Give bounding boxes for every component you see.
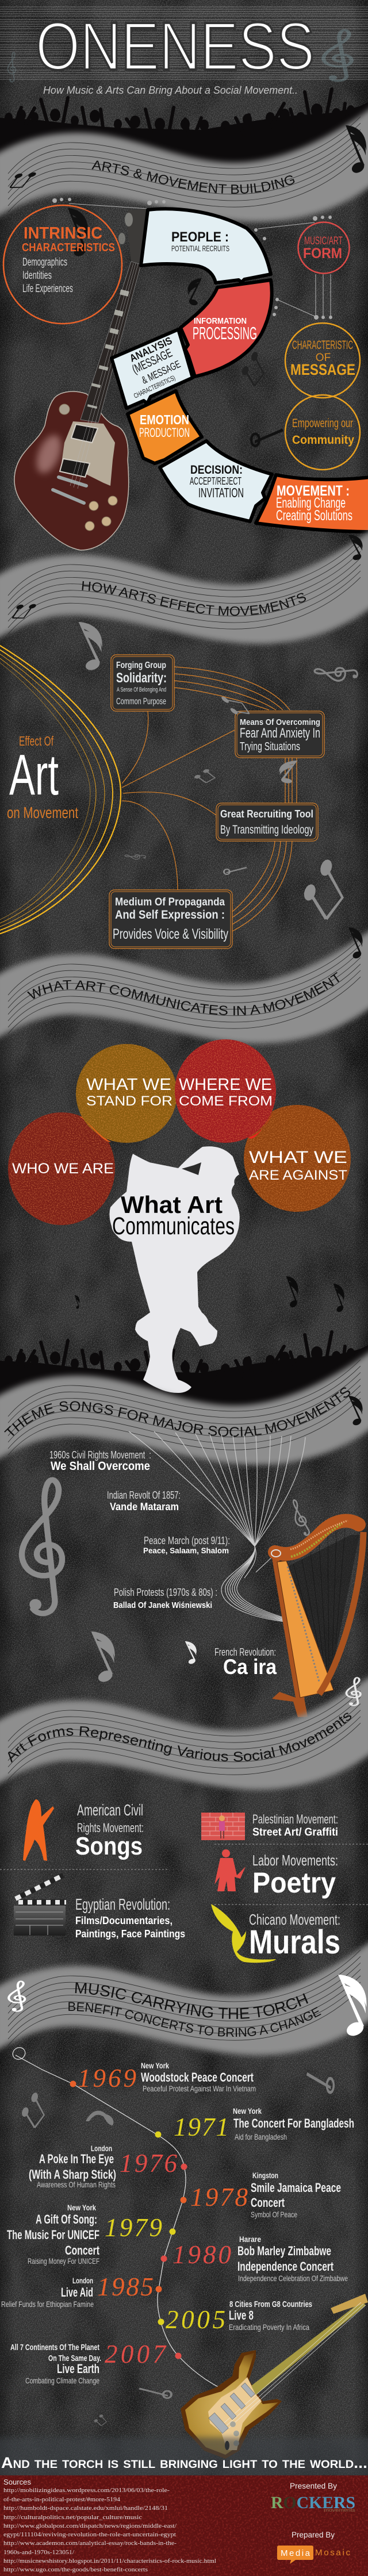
event: poke in the eye 1976 (29, 2144, 116, 2189)
event: live aid 1985: Live Aid (61, 2285, 93, 2299)
panel: footer (0, 2475, 368, 2576)
box: medium of propaganda (109, 890, 232, 949)
banner: what art communicates (0, 927, 368, 1047)
credit: prepared by: Prepared By (292, 2530, 335, 2539)
icon: note right (348, 535, 363, 561)
event: bangladesh 1971: Aid for Bangladesh (235, 2132, 287, 2141)
step: analysis: CHARACTERISTICS) (132, 374, 177, 400)
step: information processing: PROCESSING (193, 323, 257, 343)
sources list: egypt/111104/reviving-revolution-the-role-art-uncertain-egypt (3, 2531, 176, 2538)
guitar strap lines (52, 198, 332, 320)
box: great recruiting tool: Great Recruiting Tool (220, 808, 313, 820)
event: live 8 2005 (229, 2299, 312, 2332)
harp strings stream (129, 1431, 310, 1624)
step: information processing: INFORMATION (194, 316, 247, 326)
illustration: stratocaster guitar (181, 2294, 368, 2459)
sources list: http://www.academon.com/analytical-essay/rock-bands-in-the- (3, 2540, 177, 2547)
box: forging group solidarity (111, 655, 174, 711)
icon: white clef (9, 1981, 25, 2011)
label: what we stand for: WHAT WE (86, 1076, 171, 1094)
text: french revolution theme song: Ca ira (223, 1655, 277, 1679)
event: bangladesh 1971: New York (233, 2106, 262, 2116)
logo: rockers: ROCKERS (271, 2493, 355, 2512)
icon: red poet (214, 1849, 246, 1891)
year labels (78, 2064, 248, 2368)
text: indian revolt theme song (107, 1489, 181, 1512)
step: emotion production: PRODUCTION (139, 425, 190, 440)
step: information processing (181, 280, 272, 377)
circle: intrinsic characteristics: Demographics (22, 256, 67, 268)
label: what we are against: WHAT WE (249, 1148, 347, 1167)
icon: note left (8, 597, 39, 624)
step: decision: INVITATION (198, 485, 244, 500)
icon: black note near community (251, 428, 283, 446)
step: people: POTENTIAL RECRUITS (171, 244, 229, 253)
event: poke in the eye 1976: (With A Sharp Stick) (29, 2167, 116, 2182)
label: who we are: WHO WE ARE (12, 1161, 114, 1177)
year labels: 2005 (166, 2305, 225, 2334)
process road (112, 209, 368, 532)
box: forging group solidarity: Solidarity: (116, 670, 167, 686)
label: where we come from: WHERE WE (179, 1076, 272, 1094)
sources list: http://www.globalpost.com/dispatch/news/regions/middle-east/ (3, 2523, 177, 2529)
event: bangladesh 1971 (233, 2106, 354, 2141)
icon: note left (6, 165, 39, 193)
banner: how arts effect movements (0, 528, 368, 648)
divider lines (0, 1844, 368, 1905)
text: effect of art on movement: Effect Of (19, 734, 53, 748)
text: indian revolt theme song: Indian Revolt Of 1857: (107, 1489, 181, 1501)
illustration: harp (270, 1521, 363, 1717)
icons: floating notes (91, 1499, 312, 1684)
year labels: 1969 (78, 2064, 136, 2093)
silhouette notch (182, 1162, 201, 1175)
step: decision: DECISION: (190, 463, 243, 477)
text: peace march theme song: Peace, Salaam, Shalom (143, 1546, 229, 1555)
step: analysis (112, 329, 193, 408)
year labels: 1971 (174, 2113, 229, 2141)
circle: characteristic of message: OF (316, 352, 331, 364)
event: smile jamaica 1978 (251, 2171, 341, 2219)
text: effect of art on movement: Art (9, 743, 59, 807)
circle: music/art form: FORM (303, 245, 342, 262)
sources list: http://mobilizingideas.wordpress.com/2013/06/03/the-role- (3, 2487, 170, 2494)
icon: white note (338, 1975, 366, 2038)
icon: faint treble clef left (7, 52, 16, 82)
step: people (141, 209, 271, 283)
box: forging group solidarity: Common Purpose (116, 697, 166, 707)
text: american civil rights songs: Rights Movement: (77, 1821, 144, 1835)
panel: effect of art on movement (0, 622, 357, 949)
box: forging group solidarity: A Sense Of Belonging And (117, 686, 166, 693)
box: medium of propaganda: Provides Voice & Visibility (113, 926, 228, 942)
timeline line (16, 2055, 246, 2399)
sources list: http://humboldt-dspace.calstate.edu/xmlui/handle/2148/31 (3, 2505, 168, 2512)
banner: theme songs (0, 1349, 368, 1469)
icon: brick wall with girl (201, 1813, 245, 1840)
step: movement (256, 475, 368, 532)
circle: intrinsic characteristics (3, 205, 122, 324)
icon: small note (187, 278, 202, 306)
illustration: les paul guitar (14, 209, 147, 550)
subtitle: How Music & Arts Can Bring About a Social Movement.. (43, 85, 298, 96)
icon: white clef (346, 1677, 361, 1706)
box: forging group solidarity: Forging Group (116, 661, 166, 670)
logo: media mosaic: Media (281, 2548, 310, 2558)
event: live earth 2007: On The Same Day. (48, 2354, 101, 2363)
step: emotion production (128, 391, 202, 463)
circle: intrinsic characteristics: CHARACTERISTICS (22, 241, 115, 254)
text: indian revolt theme song: Vande Mataram (110, 1501, 179, 1512)
event: gift of song 1979: New York (67, 2203, 96, 2212)
event: gift of song 1979: Raising Money For UNICEF (28, 2256, 99, 2266)
text: american civil rights songs: Songs (75, 1832, 143, 1860)
icons: grey floating notes (79, 622, 357, 920)
icon: note behind intrinsic circle (68, 208, 88, 258)
step: analysis: & MESSAGE (140, 358, 182, 386)
event: live earth 2007: Live Earth (57, 2362, 99, 2376)
sources list (3, 2478, 216, 2573)
icon: yellow quill (211, 1904, 276, 1963)
event: poke in the eye 1976: Awareness Of Human Rights (37, 2180, 116, 2189)
event: live earth 2007: Combating Climate Change (25, 2376, 99, 2385)
icon: big treble clef (22, 1480, 62, 1614)
event: gift of song 1979: The Music For UNICEF (7, 2228, 99, 2242)
event: live earth 2007: All 7 Continents Of The Planet (10, 2343, 99, 2352)
event: gift of song 1979 (7, 2203, 99, 2266)
step: people: PEOPLE : (171, 229, 229, 245)
timeline dots (70, 2081, 187, 2359)
icon: whole note start (10, 2045, 28, 2061)
panel: theme songs (22, 1431, 363, 1717)
event: bob marley 1980: Harare (239, 2235, 261, 2244)
circle: empowering our community: Community (292, 433, 354, 447)
year labels: 1979 (105, 2213, 162, 2242)
step: decision (160, 441, 272, 521)
step: decision: ACCEPT/REJECT (190, 475, 241, 487)
crowd silhouette lower (0, 1332, 368, 1415)
silhouette: guitarist (109, 1146, 240, 1393)
panel: arts and movement building (3, 198, 368, 550)
connectors between boxes (122, 667, 297, 931)
logo: media mosaic: Mosaic (315, 2548, 351, 2558)
event: live aid 1985 (1, 2276, 94, 2309)
text: civil rights theme song: 1960s Civil Rights Movement : (49, 1449, 151, 1461)
text: polish protests theme song: Polish Protests (1970s & 80s) : (114, 1587, 217, 1598)
logo: media mosaic (277, 2546, 351, 2564)
credit: presented by: Presented By (290, 2481, 337, 2490)
sources list: Sources (3, 2478, 31, 2486)
text: french revolution theme song: French Revolution: (214, 1646, 276, 1658)
heading: arts and movement building: ARTS & MOVEMENT BUILDING (91, 160, 294, 194)
icon: note right (348, 1396, 363, 1426)
text: french revolution theme song (214, 1646, 277, 1679)
circle: music/art form: MUSIC/ART (304, 235, 343, 247)
subheading: benefit concerts: BENEFIT CONCERTS TO BRING A CHANGE (68, 2002, 321, 2037)
text: egyptian revolution: Films/Documentaries, (75, 1915, 172, 1926)
label: what we are against (249, 1148, 347, 1183)
year labels: 1980 (172, 2240, 231, 2269)
text: american civil rights songs: American Civil (77, 1801, 143, 1819)
text: american civil rights songs (75, 1801, 144, 1860)
circle: intrinsic characteristics: Life Experiences (22, 283, 73, 295)
circle: empowering our community (285, 395, 360, 470)
event: woodstock 1969 (141, 2061, 256, 2093)
panel: timeline (1, 2045, 368, 2459)
heading: how arts effect movements: HOW ARTS EFFECT MOVEMENTS (82, 581, 306, 616)
icon: note right (346, 125, 366, 175)
event: poke in the eye 1976: A Poke In The Eye (39, 2152, 114, 2166)
title: ONENESS (36, 9, 315, 85)
event: bob marley 1980: Bob Marley Zimbabwe (237, 2244, 331, 2258)
event: gift of song 1979: A Gift Of Song: (36, 2212, 97, 2226)
icon: dark beamed note (241, 351, 264, 386)
text: palestinian street art: Street Art/ Graffiti (252, 1826, 338, 1838)
concentric yellow arcs (0, 642, 121, 935)
heading: art forms representing various social movements: Art Forms Representing Various Social Movements (8, 1713, 352, 1763)
icon: orange guitarist (23, 1799, 54, 1861)
icons: black notes (75, 1276, 344, 1313)
text: polish protests theme song (113, 1587, 217, 1610)
label: what we stand for: STAND FOR (86, 1093, 172, 1109)
event: smile jamaica 1978: Kingston (252, 2171, 278, 2180)
heading: theme songs for major social movements: THEME SONGS FOR MAJOR SOCIAL MOVEMENTS (4, 1387, 351, 1437)
label: what we stand for (86, 1076, 172, 1109)
closing headline: And the torch is still bringing light to the world... (1, 2454, 367, 2471)
sources list: 1960s-and-1970s-123051/ (3, 2549, 75, 2556)
event: live aid 1985: Relief Funds for Ethiopian Famine (1, 2299, 94, 2309)
sources list: http://musicnewshistory.blogspot.in/2011/11/characteristics-of-rock-music.html (3, 2558, 216, 2565)
text: labor poetry (252, 1852, 338, 1899)
text: egyptian revolution (75, 1895, 185, 1940)
label: where we come from (179, 1076, 273, 1109)
heading: what art communicates in a movement: WHAT ART COMMUNICATES IN A MOVEMENT (27, 972, 339, 1015)
year labels: 1976 (120, 2149, 177, 2178)
box: means of overcoming fear: Means Of Overcoming (240, 717, 320, 727)
event: live 8 2005: 8 Cities From G8 Countries (229, 2299, 312, 2309)
box: means of overcoming fear (235, 711, 324, 758)
text: chicano murals (249, 1911, 340, 1961)
banner: arts and movement building (0, 106, 368, 226)
banner: music carrying the torch (0, 1938, 368, 2059)
event: live earth 2007 (10, 2343, 101, 2385)
box: medium of propaganda: Medium Of Propaganda (115, 896, 225, 908)
label: what we are against: ARE AGAINST (249, 1168, 347, 1183)
footer band colour (0, 2437, 368, 2478)
heading: what art communicates (112, 1191, 235, 1240)
text: egyptian revolution: Paintings, Face Paintings (75, 1928, 185, 1940)
icon: note right (348, 927, 363, 960)
circle: characteristic of message (285, 323, 360, 398)
event: poke in the eye 1976: London (91, 2144, 112, 2153)
text: effect of art on movement (7, 734, 78, 821)
header staff lines (0, 7, 368, 79)
crowd silhouette top (0, 89, 368, 172)
event: gift of song 1979: Concert (65, 2243, 99, 2258)
circle: intrinsic characteristics: Identities (22, 270, 52, 282)
logo: rockers: movements (324, 2508, 355, 2513)
step: analysis: (MESSAGE (130, 346, 174, 377)
event: live 8 2005: Live 8 (229, 2308, 254, 2322)
sources list: http://www.ugo.com/the-goods/best-benefit-concerts (3, 2566, 148, 2573)
text: peace march theme song: Peace March (post 9/11): (144, 1535, 230, 1546)
icon: clapperboard (14, 1875, 66, 1936)
label: where we come from: COME FROM (179, 1093, 273, 1109)
circle: music/art form (298, 222, 350, 274)
text: effect of art on movement: on Movement (7, 804, 78, 821)
year labels: 2007 (105, 2340, 167, 2368)
text: palestinian street art (252, 1812, 338, 1838)
box: means of overcoming fear: Fear And Anxiety In (240, 725, 320, 741)
panel: art forms (0, 1799, 368, 1963)
box: means of overcoming fear: Trying Situations (240, 740, 300, 753)
event: woodstock 1969: New York (141, 2061, 169, 2070)
box: great recruiting tool (216, 803, 318, 841)
text: peace march theme song (143, 1535, 230, 1555)
icons: grey notes (21, 2072, 334, 2426)
text: chicano murals: Murals (249, 1924, 340, 1961)
event: woodstock 1969: Peaceful Protest Against War In Vietnam (143, 2084, 256, 2093)
box: medium of propaganda: And Self Expression : (115, 908, 225, 922)
text: labor poetry: Poetry (252, 1867, 336, 1899)
panel: what art communicates (0, 1039, 368, 1415)
sources list: http://culturalpolitics.net/popular_culture/music (3, 2514, 142, 2521)
event: woodstock 1969: Woodstock Peace Concert (141, 2070, 254, 2084)
circle: characteristic of message: MESSAGE (290, 361, 355, 378)
text: egyptian revolution: Egyptian Revolution: (75, 1895, 170, 1913)
step: movement: MOVEMENT : (277, 483, 350, 499)
circle: intrinsic characteristics: INTRINSIC (24, 224, 102, 243)
year labels: 1985 (97, 2272, 154, 2301)
heading: what art communicates: What Art (121, 1191, 223, 1218)
step: analysis: ANALYSIS (128, 335, 174, 364)
event: live 8 2005: Eradicating Poverty In Africa (229, 2322, 309, 2332)
venn circles (8, 1039, 351, 1225)
event: bob marley 1980 (237, 2235, 348, 2283)
step: emotion production: EMOTION (140, 412, 189, 427)
banner: art forms (0, 1673, 368, 1794)
text: civil rights theme song (49, 1449, 151, 1473)
event: smile jamaica 1978: Concert (251, 2195, 285, 2210)
icon: faint treble clef right (323, 30, 351, 81)
sources list: of-the-arts-in-political-protest/#more-5194 (3, 2496, 121, 2503)
heading: what art communicates: Communicates (112, 1212, 235, 1240)
event: smile jamaica 1978: Symbol Of Peace (251, 2210, 297, 2219)
heading: music carrying the torch: MUSIC CARRYING THE TORCH (75, 1982, 308, 2019)
overlap highlights (80, 1116, 111, 1142)
text: polish protests theme song: Ballad Of Janek Wiśniewski (113, 1600, 212, 1610)
text: civil rights theme song: We Shall Overcome (51, 1460, 150, 1473)
box: great recruiting tool: By Transmitting Ideology (220, 823, 313, 836)
event: live aid 1985: London (72, 2276, 93, 2285)
year labels: 1978 (190, 2183, 248, 2212)
